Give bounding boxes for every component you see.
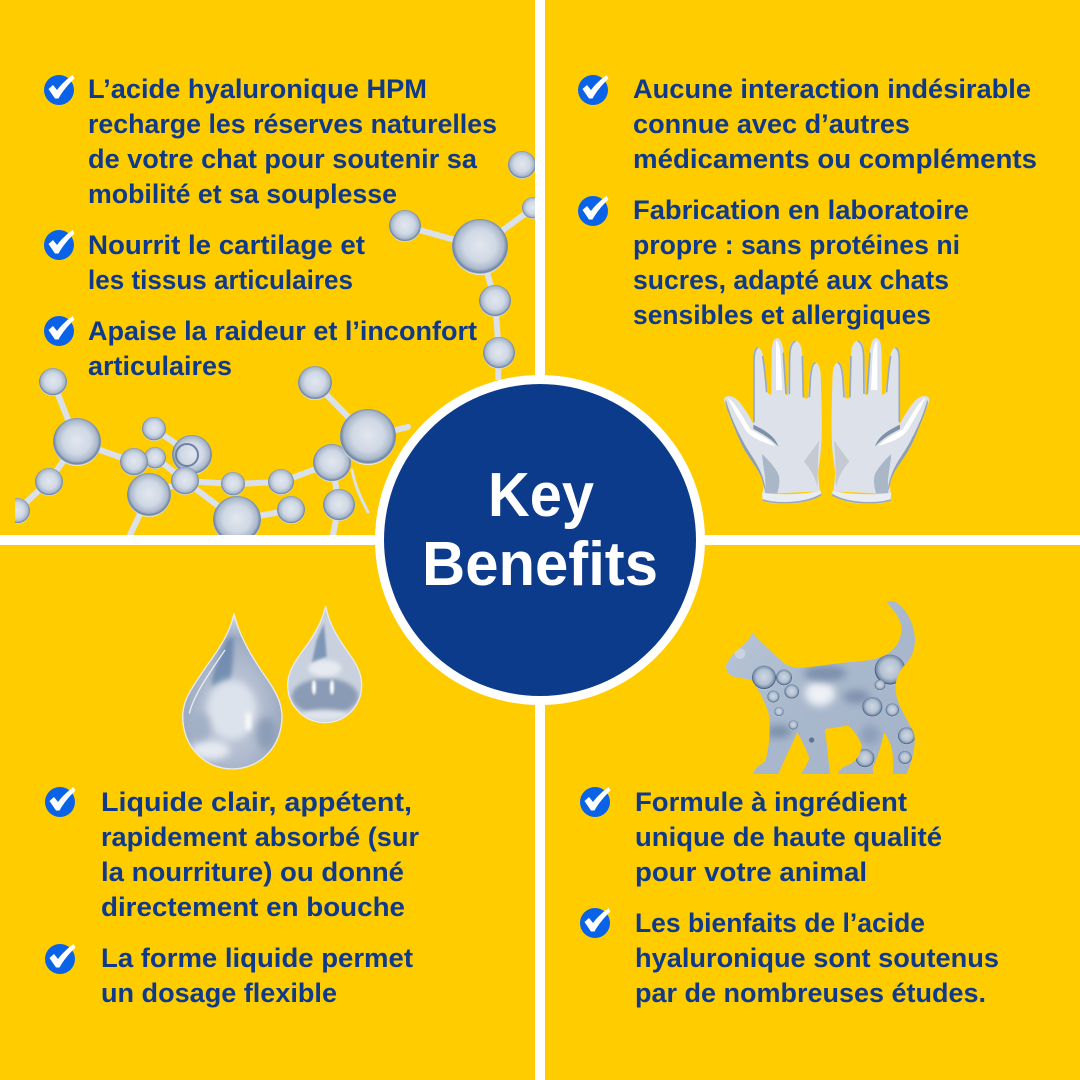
text: hyaluronic acid benefit: de votre chat pour soutenir sa: [88, 144, 478, 174]
icon: check: [45, 944, 76, 974]
text: clean lab manufacture: sensibles et allergiques: [633, 300, 931, 330]
text: no interactions: Aucune interaction indésirable: [633, 74, 1031, 104]
icon: cat silhouette with bubbles: [726, 600, 915, 774]
center badge: Key Benefits: Benefits: [422, 530, 658, 599]
icon: gloves: [724, 338, 929, 504]
text: clear palatable liquid: Liquide clair, appétent,: [101, 787, 412, 817]
panel: top-left benefits: [44, 74, 497, 381]
text: clean lab manufacture: [633, 195, 969, 330]
text: no interactions: médicaments ou compléments: [633, 144, 1037, 174]
finger and thumb edge shading: [754, 341, 815, 422]
text: cartilage benefit: [88, 230, 365, 295]
text: backed by studies: par de nombreuses études.: [635, 978, 986, 1008]
panel: top-right benefits: [578, 74, 1037, 330]
text: stiffness benefit: articulaires: [88, 351, 232, 381]
text: hyaluronic acid benefit: [88, 74, 497, 209]
text: clean lab manufacture: propre : sans protéines ni: [633, 230, 960, 260]
text: clean lab manufacture: sucres, adapté aux chats: [633, 265, 949, 295]
panel: top-left molecules: [4, 151, 544, 544]
text: single ingredient formula: Formule à ingrédient: [635, 787, 907, 817]
text: cartilage benefit: les tissus articulaires: [88, 265, 353, 295]
text: flexible dosing: La forme liquide permet: [101, 943, 413, 973]
text: backed by studies: [635, 908, 999, 1008]
panel: bottom-right benefits: [580, 787, 999, 1008]
text: single ingredient formula: pour votre animal: [635, 857, 867, 887]
text: clear palatable liquid: la nourriture) ou donné: [101, 857, 404, 887]
text: no interactions: [633, 74, 1037, 174]
icon: check: [44, 75, 74, 105]
icon: check: [578, 196, 608, 226]
text: hyaluronic acid benefit: L’acide hyaluronique HPM: [88, 74, 427, 104]
icon: check: [580, 908, 610, 938]
text: single ingredient formula: [635, 787, 942, 887]
icon: check: [44, 230, 74, 260]
text: hyaluronic acid benefit: recharge les réserves naturelles: [88, 109, 497, 139]
icon: check: [45, 787, 76, 817]
text: flexible dosing: un dosage flexible: [101, 978, 337, 1008]
text: hyaluronic acid benefit: mobilité et sa souplesse: [88, 179, 397, 209]
text: single ingredient formula: unique de haute qualité: [635, 822, 942, 852]
text: flexible dosing: [101, 943, 413, 1008]
text: no interactions: connue avec d’autres: [633, 109, 910, 139]
center badge: Key Benefits: [375, 375, 705, 705]
text: stiffness benefit: [88, 316, 477, 381]
icon: check: [580, 787, 610, 817]
text: clear palatable liquid: directement en bouche: [101, 892, 405, 922]
icon: check: [578, 75, 608, 105]
center badge: Key Benefits: Key: [488, 461, 594, 530]
text: backed by studies: Les bienfaits de l’acide: [635, 908, 925, 938]
icon: water drops: [180, 603, 365, 773]
text: stiffness benefit: Apaise la raideur et l’inconfort: [88, 316, 477, 346]
text: clear palatable liquid: [101, 787, 419, 922]
text: clean lab manufacture: Fabrication en laboratoire: [633, 195, 969, 225]
panel: bottom-left benefits: [45, 787, 419, 1008]
text: backed by studies: hyaluronique sont soutenus: [635, 943, 999, 973]
icon: check: [44, 316, 74, 346]
text: clear palatable liquid: rapidement absorbé (sur: [101, 822, 419, 852]
text: cartilage benefit: Nourrit le cartilage et: [88, 230, 365, 260]
